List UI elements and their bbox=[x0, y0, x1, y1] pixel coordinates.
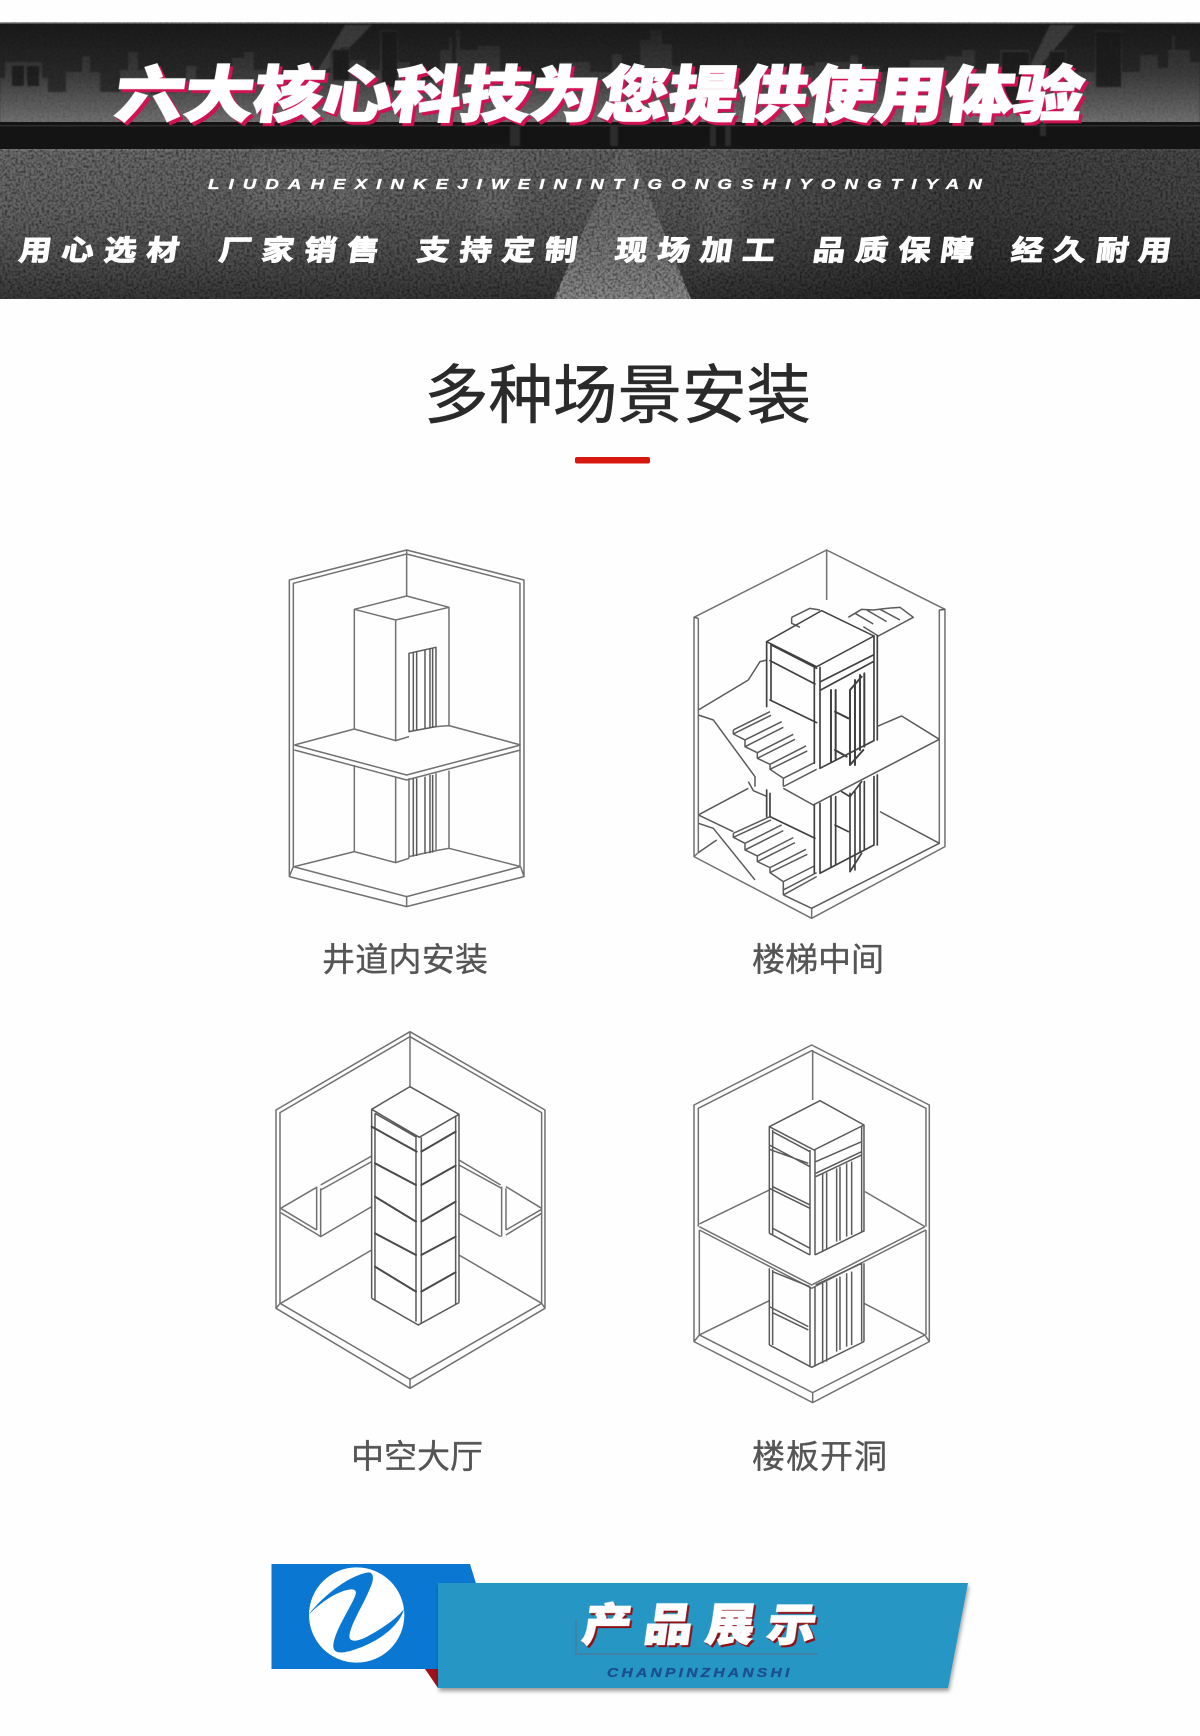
heading red underline bbox=[575, 457, 650, 464]
logo mark bbox=[308, 1567, 404, 1663]
product pinyin: CHANPINZHANSHI bbox=[607, 1666, 790, 1681]
diagram: shaft installation bbox=[289, 550, 524, 907]
teal title panel bbox=[438, 1583, 968, 1688]
red corner bbox=[425, 1669, 438, 1688]
label: atrium hall: 中空大厅 bbox=[351, 1438, 483, 1475]
banner feature list: 现场加工 bbox=[613, 235, 788, 266]
blue logo panel bbox=[272, 1564, 478, 1669]
diagram: atrium hall bbox=[276, 1032, 545, 1388]
title frame line bbox=[576, 1619, 818, 1654]
banner feature list: 品质保障 bbox=[811, 235, 986, 266]
banner feature list: 支持定制 bbox=[415, 235, 590, 266]
banner feature list: 用心选材 bbox=[17, 235, 192, 266]
product banner bbox=[272, 1564, 968, 1688]
label: floor opening: 楼板开洞 bbox=[752, 1438, 887, 1475]
diagram: floor opening bbox=[694, 1045, 929, 1403]
upper stair flight bbox=[733, 712, 817, 787]
product title: 产品展示 bbox=[580, 1600, 833, 1649]
label: between stairs: 楼梯中间 bbox=[752, 941, 884, 978]
banner pinyin subtitle: LIUDAHEXINKEJIWEININTIGONGSHIYONGTIYAN bbox=[208, 176, 983, 193]
banner: night city and road bbox=[0, 22, 1200, 299]
banner feature list: 经久耐用 bbox=[1009, 235, 1184, 266]
banner feature list: 厂家销售 bbox=[217, 235, 392, 266]
diagram: between stairs bbox=[694, 550, 945, 918]
label: shaft installation: 井道内安装 bbox=[322, 941, 488, 978]
section heading: 多种场景安装 bbox=[424, 360, 811, 432]
lower stair flight bbox=[733, 817, 817, 890]
banner title: 六大核心科技为您提供使用体验 bbox=[111, 62, 1088, 129]
banner feature list bbox=[17, 235, 1184, 266]
